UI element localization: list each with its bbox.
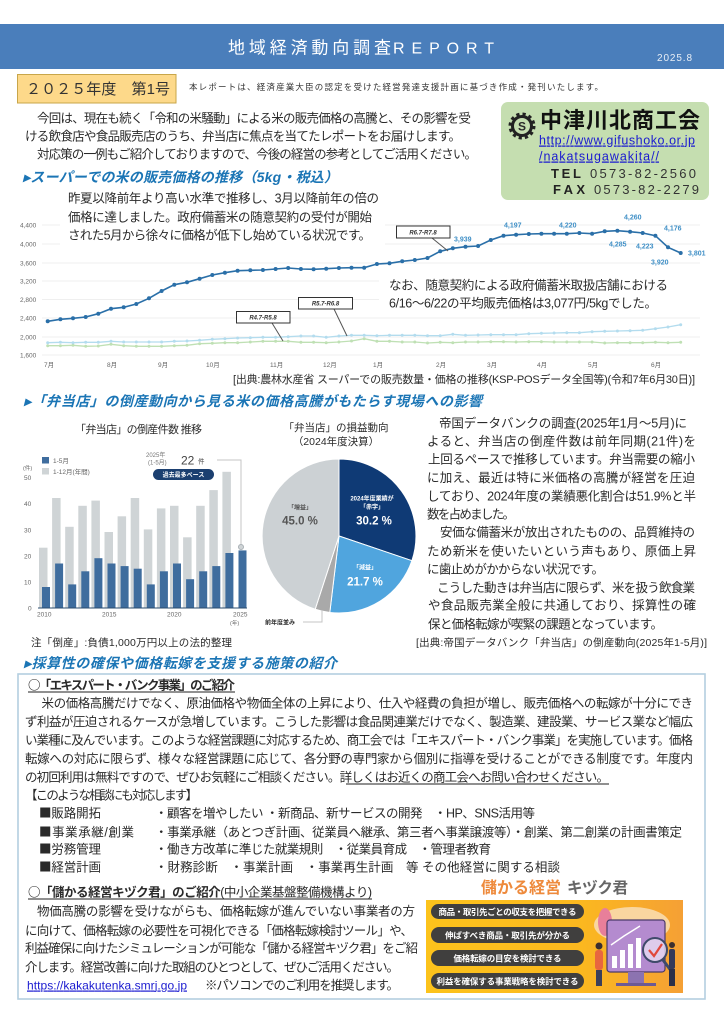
chart commentary [60, 188, 385, 245]
month labels: 9月 [158, 361, 168, 369]
report title: 地域経済動向調査 [228, 38, 391, 58]
month labels: 10月 [206, 361, 220, 369]
series: R5.7-R6.8 [48, 325, 681, 343]
promo title: 儲かる経営 [481, 878, 561, 897]
link and note: ※パソコンでのご利用を推奨します。 [205, 978, 399, 992]
slice: decreased profit [330, 536, 412, 613]
value labels: 4,220 [559, 222, 577, 230]
y axis labels: 2,000 [20, 334, 37, 342]
chart title [284, 421, 388, 448]
website link: /nakatsugawakita// [539, 150, 660, 164]
x axis: (年) [230, 619, 239, 627]
consultation list: ■事業承継/創業 [39, 822, 134, 840]
month labels: 1月 [373, 361, 383, 369]
promo title: キヅク君 [567, 879, 628, 897]
month labels: 2月 [436, 361, 446, 369]
chart commentary: された5月から徐々に価格が低下し始めている状況です。 [68, 228, 371, 242]
value labels: 4,285 [609, 242, 627, 248]
heading: rice price trend: ▸スーパーでの米の販売価格の推移（5kg・税込） [22, 169, 338, 185]
month labels: 7月 [44, 361, 54, 369]
intro text: 対応策の一例もご紹介しておりますので、今後の経営の参考としてご活用ください。 [37, 146, 477, 162]
intro text: 今回は、現在も続く「令和の米騒動」による米の販売価格の高騰と、その影響を受 [37, 110, 471, 126]
pie chart: profit and loss [262, 421, 416, 626]
legend: 1-5月 [53, 457, 69, 465]
y axis labels: 2,400 [20, 316, 37, 322]
banner [426, 900, 683, 993]
expert bank section [25, 674, 693, 876]
label: same as previous year [265, 610, 322, 626]
series tag: R6.7-R7.8 [396, 226, 450, 251]
section heading: ○「エキスパート・バンク事業」のご紹介 [28, 674, 235, 694]
slice: same as previous year [315, 536, 339, 612]
series tag: R5.7-R6.8: R5.7-R6.8 [312, 302, 340, 308]
value labels: 4,197 [504, 222, 522, 230]
website link [539, 134, 695, 164]
issue date: 2025.8 [657, 53, 692, 64]
label: increased [282, 504, 318, 528]
series tag: R4.7-R5.8 [236, 312, 290, 341]
label: decreased: 21.7 % [347, 576, 383, 588]
label: deficit: 30.2 % [356, 516, 392, 528]
legend: 1-12月(年間) [53, 467, 90, 476]
label: same as previous year: 前年度並み [265, 618, 295, 626]
organisation name: 中津川北商工会 [540, 108, 700, 133]
chart commentary: 昨夏以降前年より高い水準で推移し、3月以降前年の倍の [68, 190, 379, 206]
intro text: ける飲食店や食品販売店のうち、弁当店に焦点を当てたレポートをお届けします。 [25, 128, 461, 144]
body text: 物価高騰の影響を受けながらも、価格転嫁が進んでいない事業者の方 [37, 904, 415, 918]
panel: support measures [18, 674, 705, 999]
telephone: 0573-82-2560 [590, 166, 696, 181]
chart title: 「弁当店」の損益動向 [284, 421, 388, 434]
chart note: stockpile rice price [379, 271, 701, 311]
y axis: 10 [24, 580, 32, 586]
body text: い業種に及んでいます。このような経営課題に対応するため、商工会では「エキスパート・バンク事業」を実施しています。価格 [25, 732, 693, 748]
bankruptcy commentary: 数を占めました。 [427, 506, 515, 522]
bankruptcy commentary: しており、2024年度の業績悪化割合は51.9%と半 [427, 488, 696, 504]
chart note: stockpile rice price: 6/16～6/22の平均販売価格は3,077円/5kgでした。 [389, 296, 657, 310]
month labels [44, 361, 661, 369]
bankruptcy commentary: こうした動きは弁当店に限らず、米を扱う飲食業 [437, 580, 695, 595]
bankruptcy commentary: ため新米を使いたいという声もあり、原価上昇 [427, 544, 696, 558]
callout: 2025 record [146, 451, 244, 550]
body text: ず利益が圧迫されるケースが急増しています。こうした影響は食品関連業だけでなく、製造業、建設業、サービス業など幅広 [25, 714, 693, 729]
bar chart: bankruptcies [23, 422, 248, 627]
label: decreased [347, 564, 383, 588]
value labels: 3,801 [688, 250, 706, 258]
label: deficit [350, 494, 394, 528]
callout: 2025 record: 2025年 [146, 451, 165, 459]
graphic: kizuku-kun promo [426, 878, 683, 993]
month labels: 3月 [487, 361, 497, 369]
January to May bars [42, 550, 246, 608]
label: increased: 「増益」 [288, 504, 312, 512]
bankruptcy commentary: に歯止めがかからない状況です。 [427, 562, 604, 576]
bankruptcy commentary: よると、弁当店の倒産件数は前年同期(21件)を [427, 434, 696, 448]
callout: 2025 record: 件 [198, 456, 205, 466]
value labels: 3,920 [651, 260, 669, 266]
contact panel [501, 102, 709, 200]
callout: 2025 record: (1-5月) [148, 460, 167, 466]
icon: gear logo [510, 114, 534, 138]
value labels: 4,223 [636, 244, 654, 250]
callout: 2025 record: 22 [181, 454, 195, 468]
report title [228, 38, 494, 58]
y axis: 0 [28, 606, 32, 612]
body text [25, 696, 693, 784]
bankruptcy commentary [427, 416, 696, 632]
month labels: 6月 [651, 361, 661, 369]
body text: 利益確保に向けたシミュレーションが可能な「儲かる経営キヅク君」をご紹 [25, 940, 418, 956]
body text: 介します。経営改善に向けた取組のひとつとして、ぜひご活用ください。 [25, 960, 399, 974]
link and note: https://kakakutenka.smrj.go.jp [27, 978, 187, 992]
series: R4.7-R5.8 [48, 339, 681, 346]
consultation list: ・働き方改革に準じた就業規則 ・従業員育成 ・管理者教育 [155, 842, 491, 856]
issue number box [18, 74, 176, 103]
x axis [37, 612, 248, 627]
x axis: 2025 [233, 612, 248, 618]
fax: FAX [553, 182, 585, 197]
callout: 2025 record: 過去最多ペース [163, 471, 204, 479]
telephone: TEL [551, 166, 581, 181]
section heading: ○「儲かる経営キヅク君」のご紹介(中小企業基盤整備機構より) [28, 882, 372, 900]
y axis [23, 464, 32, 612]
promo title [481, 878, 628, 897]
illustration: monitor with chart and magnifier [595, 908, 675, 986]
series: R6.7-R7.8 [48, 231, 681, 321]
x axis: 2020 [167, 612, 182, 618]
website link: http://www.gifushoko.or.jp [539, 134, 695, 148]
link and note [27, 978, 399, 992]
label: deficit: 「赤字」 [360, 503, 384, 511]
feature pills [431, 904, 584, 989]
bankruptcy commentary: や食品販売業全般に共通しており、採算性の確 [428, 598, 696, 612]
y axis labels: 3,200 [20, 278, 37, 286]
slice: deficit [339, 459, 416, 561]
source: rice price: [出典:農林水産省 スーパーでの販売数量・価格の推移(KSP-POSデータ全国等)(令和7年6月30日)] [233, 372, 695, 386]
feature pills: 商品・取引先ごとの収支を把握できる [438, 907, 576, 917]
body text: の初回利用は無料ですので、ぜひお気軽にご相談ください。詳しくはお近くの商工会へお問い合わせください。 [25, 770, 609, 784]
bankruptcy commentary: に加え、最近は特に米価格の高騰が経営を圧迫 [427, 470, 695, 485]
month labels: 5月 [588, 361, 598, 369]
consultation list [25, 788, 682, 876]
bankruptcy commentary: 帝国データバンクの調査(2025年1月～5月)に [439, 416, 687, 430]
series tag: R6.7-R7.8: R6.7-R7.8 [409, 230, 437, 236]
x axis: 2010 [37, 612, 52, 618]
annual bars [39, 472, 231, 608]
header band [0, 24, 724, 69]
body text: に向けて、価格転嫁の必要性を可視化できる「価格転嫁検討ツール」や、 [25, 923, 413, 938]
month labels: 11月 [270, 361, 283, 369]
month labels: 12月 [323, 361, 337, 369]
bankruptcy commentary: 保と価格転嫁が喫緊の課題となっています。 [428, 616, 663, 632]
month labels: 8月 [107, 361, 117, 369]
people [595, 942, 675, 986]
intro text [25, 110, 477, 162]
icon: gear logo: S [518, 120, 526, 134]
y axis: 40 [24, 501, 32, 508]
report title: REPORT [393, 40, 494, 58]
line chart: rice price [20, 214, 706, 369]
value labels [454, 214, 706, 266]
label: increased: 45.0 % [282, 516, 318, 528]
consultation list: 【このような相談にも対応します】 [25, 788, 198, 802]
body text: 米の価格高騰だけでなく、原油価格や物価全体の上昇により、仕入や経費の負担が増し、販売価格への転嫁が十分にでき [42, 696, 693, 710]
month labels: 4月 [537, 361, 547, 369]
series tag: R5.7-R6.8 [298, 298, 352, 336]
value labels: 4,260 [624, 214, 642, 222]
label: deficit: 2024年度業績が [350, 494, 394, 502]
publication note: 本レポートは、経済産業大臣の認定を受けた経営発達支援計画に基づき作成・発刊いたします。 [189, 82, 603, 92]
y axis labels: 4,000 [20, 242, 37, 248]
y axis labels [20, 222, 37, 360]
consultation list: ■販路開拓 [39, 802, 101, 822]
chart commentary: 価格に達しました。政府備蓄米の随意契約の受付が開始 [68, 210, 372, 224]
y axis: (件) [23, 464, 32, 472]
chart title: （2024年度決算） [293, 435, 379, 448]
consultation list: ■労務管理 [39, 838, 101, 858]
fax: 0573-82-2279 [594, 182, 699, 197]
consultation list: ・財務診断 ・事業計画 ・事業再生計画 等 その他経営に関する相談 [155, 860, 560, 874]
consultation list: ■経営計画 [39, 856, 101, 876]
label: decreased: 「減益」 [353, 564, 377, 572]
bankruptcy commentary: 上回るペースで推移しています。弁当需要の縮小 [428, 452, 695, 466]
chart title: 「弁当店」の倒産件数 推移 [75, 422, 202, 436]
feature pills: 価格転嫁の目安を検討できる [454, 954, 562, 964]
source: bankruptcy: [出典:帝国データバンク「弁当店」の倒産動向(2025年1-5月)] [416, 636, 707, 649]
bankruptcy definition note: 注「倒産」:負債1,000万円以上の法的整理 [31, 636, 232, 649]
issue number box: ２０２５年度 第1号 [26, 81, 170, 98]
y axis labels: 1,600 [20, 352, 37, 360]
feature pills: 伸ばすべき商品・取引先が分かる [445, 930, 570, 940]
y axis: 30 [24, 528, 32, 534]
heading: bento shop bankruptcies: ▸「弁当店」の倒産動向から見る米の価格高騰がもたらす現場への影響 [23, 393, 485, 409]
slice: increased profit [262, 459, 339, 609]
legend [42, 457, 90, 476]
kizuku-kun section [25, 882, 418, 992]
value labels: 4,176 [664, 226, 682, 232]
y axis: 50 [24, 475, 32, 482]
series tag: R4.7-R5.8: R4.7-R5.8 [249, 316, 277, 322]
chart note: stockpile rice price: なお、随意契約による政府備蓄米取扱店舗における [389, 278, 668, 292]
consultation list: ・事業承継（あとつぎ計画、従業員へ継承、第三者へ事業譲渡等）・創業、第二創業の計画書策定 [155, 824, 682, 840]
heading: support measures: ▸採算性の確保や価格転嫁を支援する施策の紹介 [23, 655, 339, 671]
body text [25, 904, 418, 974]
y axis labels: 3,600 [20, 260, 37, 268]
x axis: 2015 [102, 612, 117, 618]
consultation list: ・顧客を増やしたい ・新商品、新サービスの開発 ・HP、SNS活用等 [155, 806, 535, 820]
feature pills: 利益を確保する事業戦略を検討できる [436, 976, 578, 986]
y axis labels: 4,400 [20, 222, 37, 230]
y axis labels: 2,800 [20, 297, 37, 304]
value labels: 3,939 [454, 236, 472, 244]
y axis: 20 [24, 554, 32, 560]
bankruptcy commentary: 安価な備蓄米が放出されたものの、品質維持の [440, 524, 695, 540]
body text: 転嫁への対応に限らず、様々な経営課題に応じて、各分野の専門家から個別に指導を受けることができる制度です。年度内 [25, 751, 693, 766]
